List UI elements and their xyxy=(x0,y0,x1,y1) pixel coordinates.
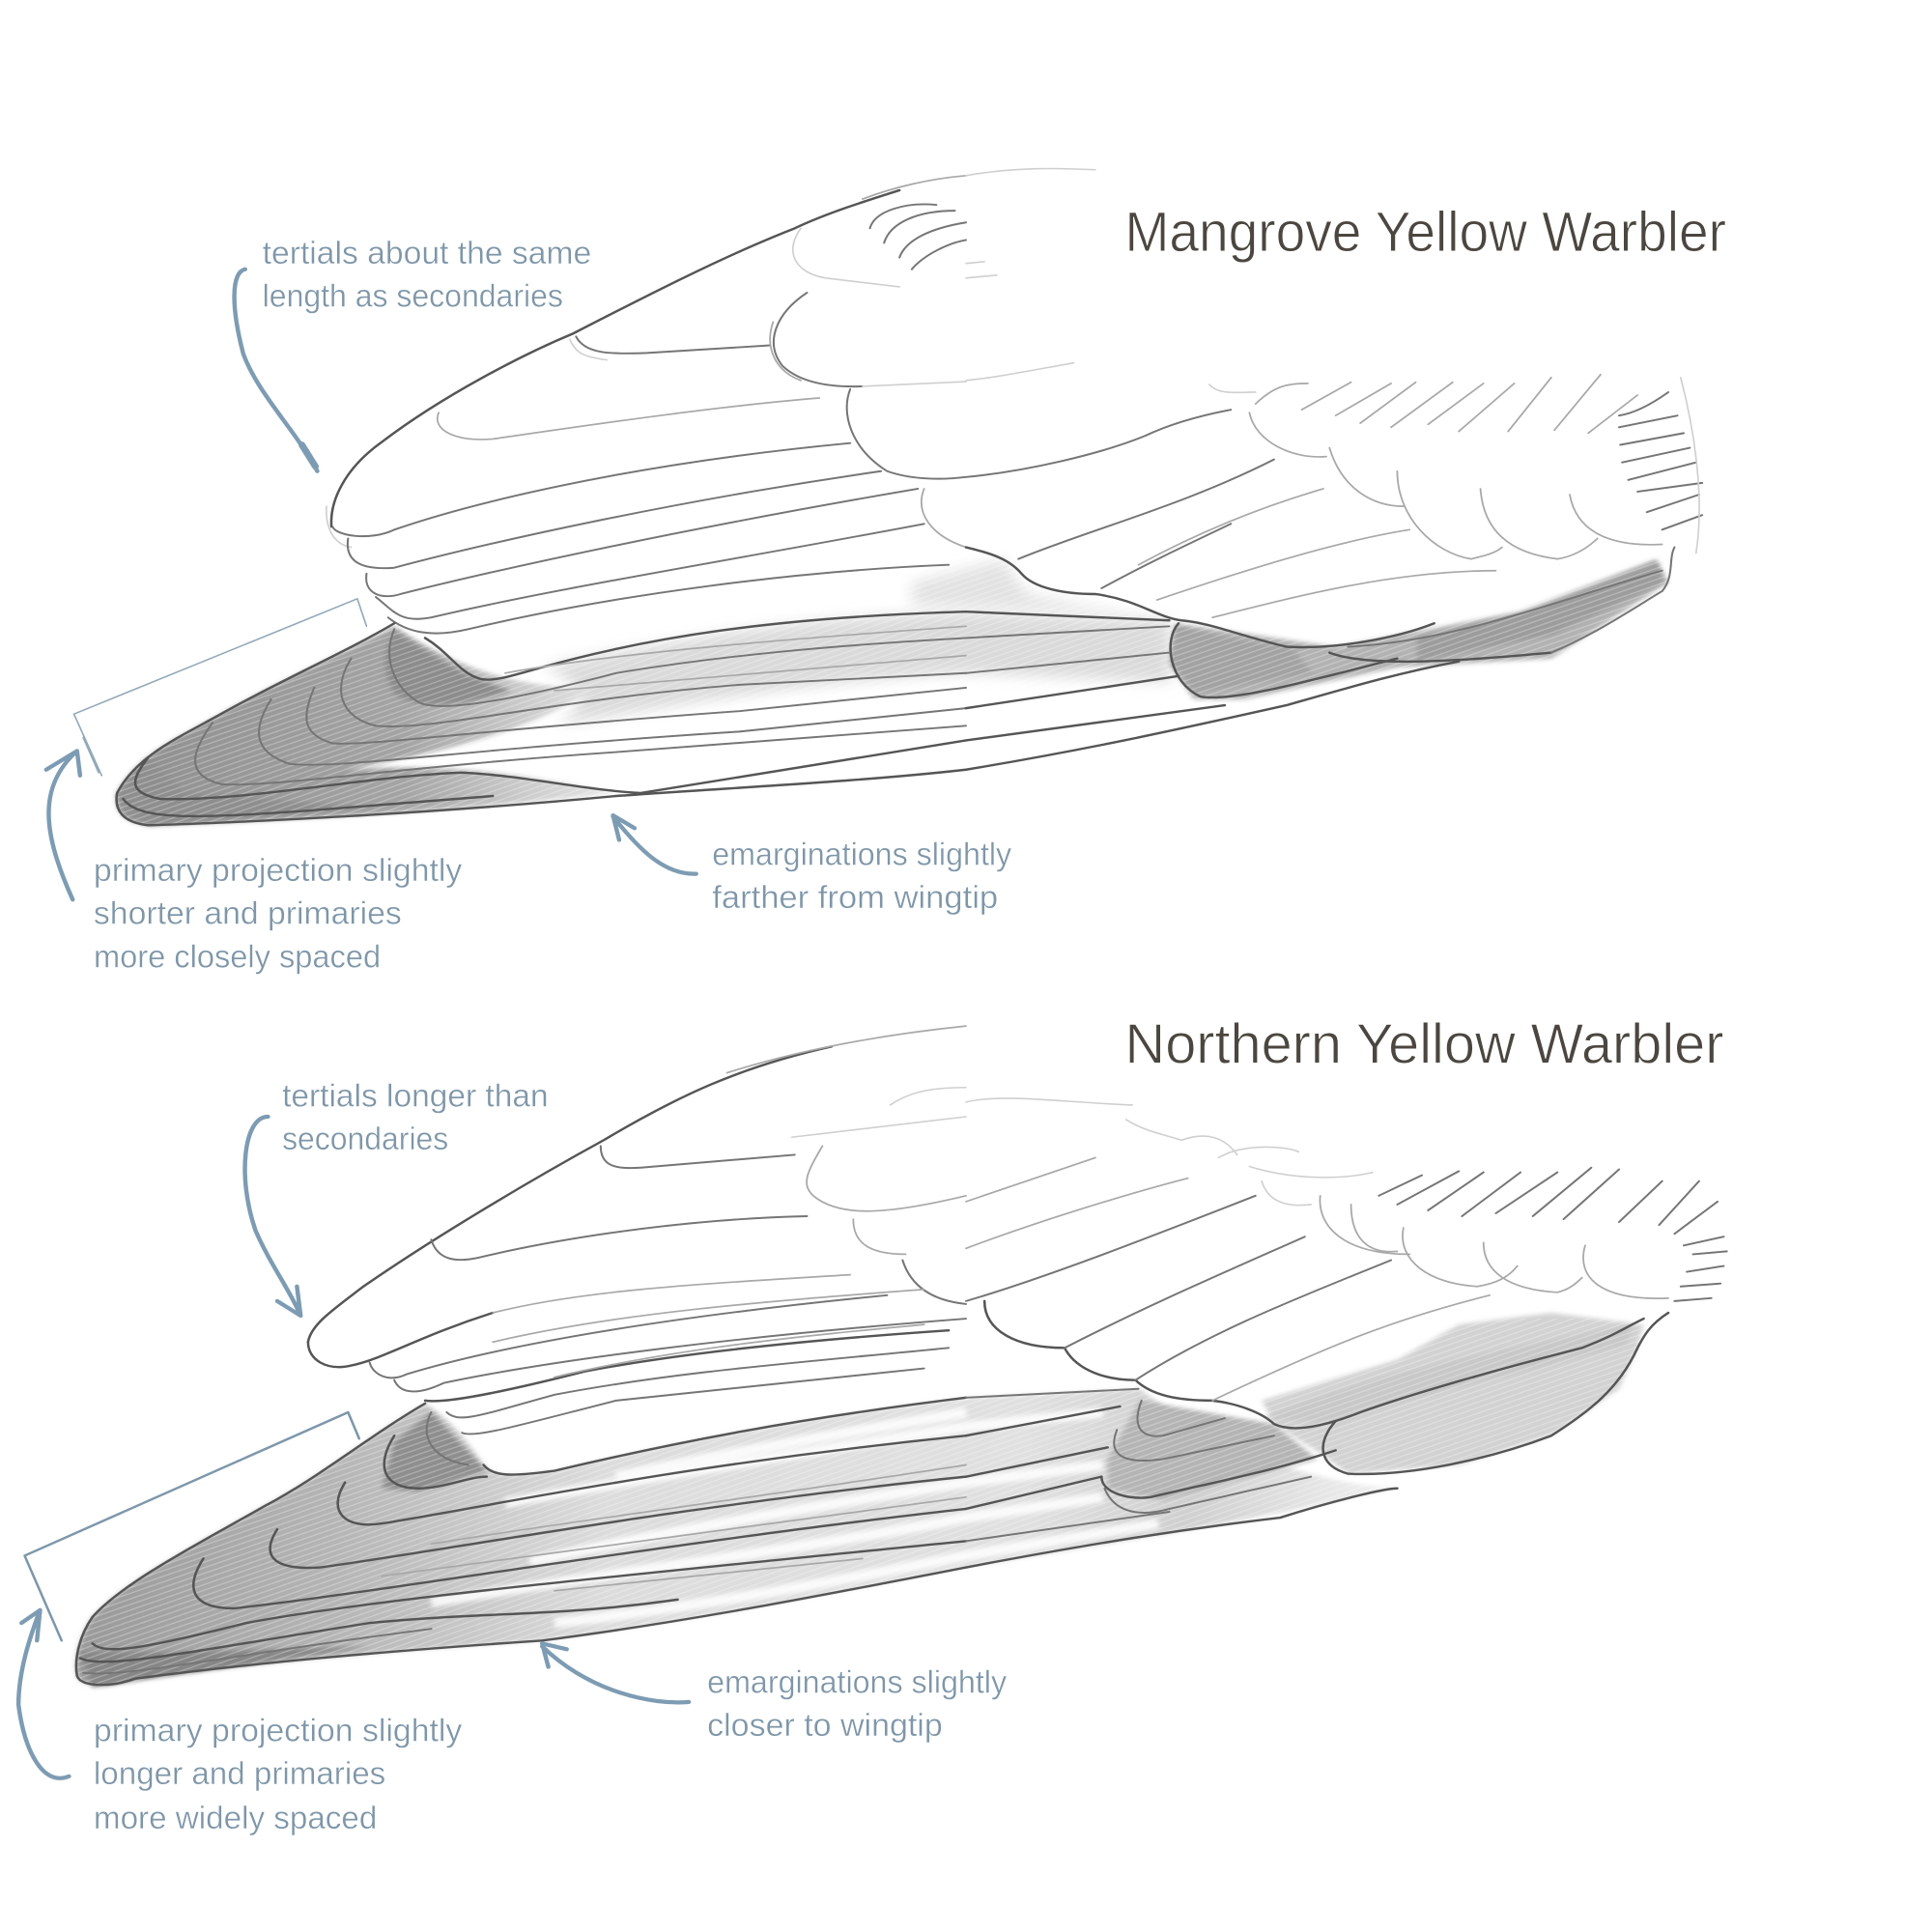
arrow: Mangrove tertials xyxy=(235,270,317,471)
bracket: Mangrove primary projection xyxy=(74,599,366,776)
annotation: Mangrove tertials xyxy=(263,236,591,315)
arrow: Mangrove emarginations xyxy=(613,815,696,874)
annotation: Northern emarginations: closer to wingtip xyxy=(707,1708,943,1744)
annotation: Northern tertials xyxy=(282,1078,549,1157)
bracket: Northern primary projection xyxy=(25,1412,359,1640)
arrow: Northern tertials xyxy=(245,1117,300,1316)
annotation: Mangrove primary projection xyxy=(94,853,463,975)
annotation: Mangrove emarginations xyxy=(712,837,1012,916)
arrow: Mangrove primary projection xyxy=(46,751,80,899)
wing shading xyxy=(55,1313,1719,1693)
illustration: Northern Yellow Warbler wing xyxy=(55,1026,1727,1693)
wing right half xyxy=(966,168,1702,770)
annotation: Northern primary projection: primary projection slightly xyxy=(94,1713,463,1748)
annotation: Mangrove primary projection: more closely spaced xyxy=(94,939,381,975)
annotation: Northern emarginations: emarginations slightly xyxy=(707,1665,1007,1701)
annotation: Mangrove emarginations: emarginations slightly xyxy=(712,837,1012,872)
illustration: Mangrove Yellow Warbler wing xyxy=(55,168,1719,834)
title: Mangrove Yellow Warbler: Mangrove Yellow Warbler xyxy=(1125,201,1726,264)
annotation: Northern primary projection: more widely spaced xyxy=(94,1801,377,1836)
annotation: Northern primary projection xyxy=(94,1713,463,1836)
annotation: Northern emarginations xyxy=(707,1665,1007,1744)
annotation: Mangrove emarginations: farther from wingtip xyxy=(712,880,998,916)
title: Northern Yellow Warbler: Northern Yellow Warbler xyxy=(1125,1013,1723,1076)
annotation: Mangrove tertials: length as secondaries xyxy=(263,279,563,315)
annotation: Northern tertials: secondaries xyxy=(282,1122,448,1157)
wing right half xyxy=(966,1098,1727,1568)
wing shading xyxy=(55,554,1719,834)
annotation: Northern primary projection: longer and primaries xyxy=(94,1756,385,1792)
wing left half xyxy=(76,1026,966,1685)
annotation: Mangrove primary projection: shorter and primaries xyxy=(94,896,402,932)
arrow: Northern primary projection xyxy=(18,1610,69,1778)
arrow: Northern emarginations xyxy=(542,1643,689,1702)
wing left half xyxy=(117,176,966,825)
annotation: Northern tertials: tertials longer than xyxy=(282,1078,549,1114)
annotation: Mangrove primary projection: primary projection slightly xyxy=(94,853,463,889)
annotation: Mangrove tertials: tertials about the same xyxy=(263,236,591,271)
